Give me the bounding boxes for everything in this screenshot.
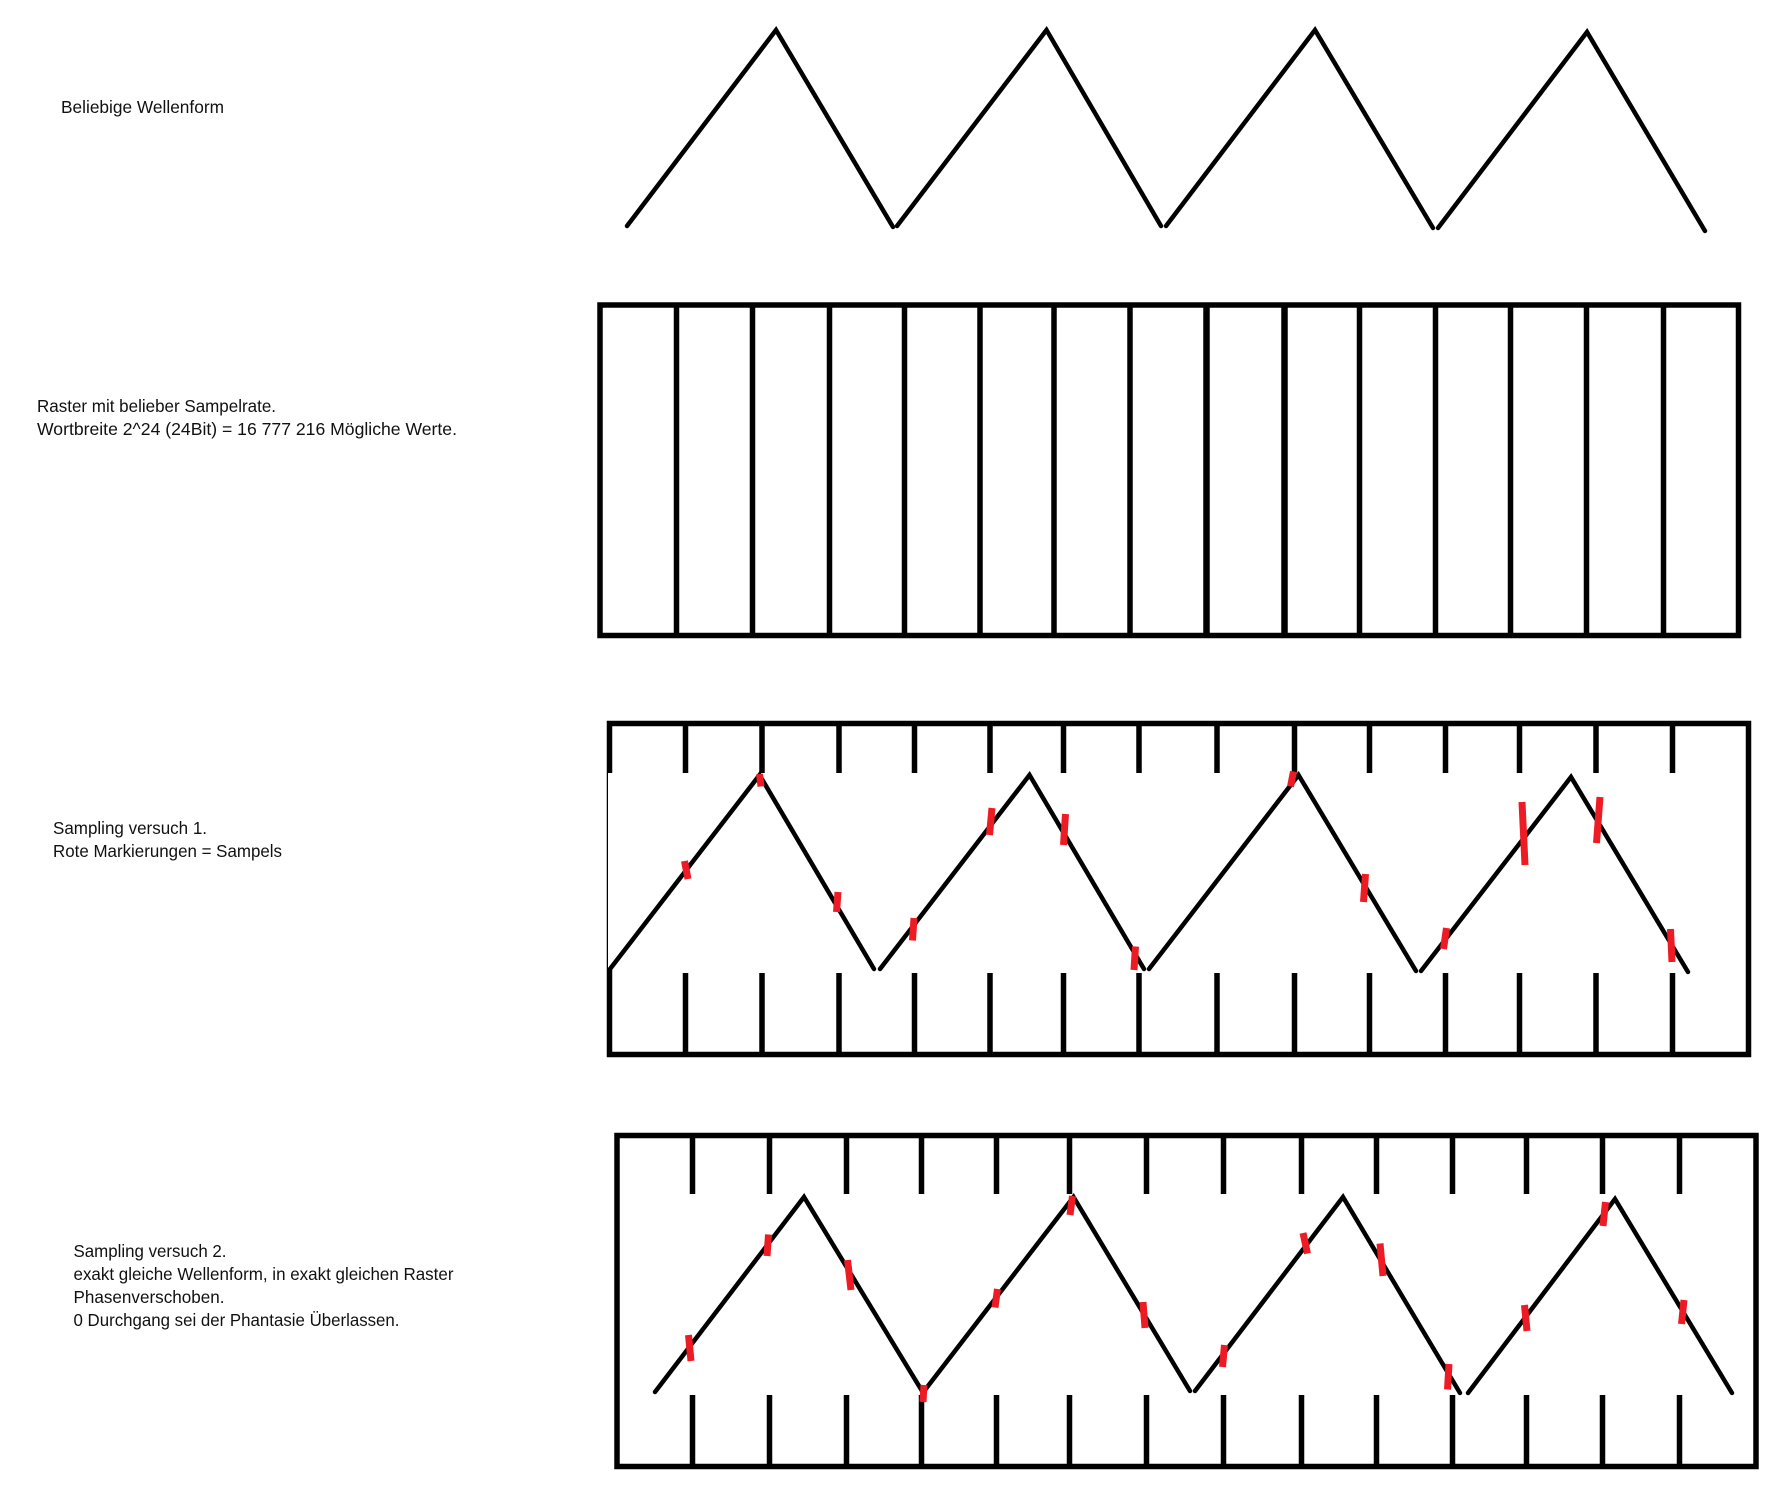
text: sampling attempt 2 description: 0 Durchgang sei der Phantasie Überlassen.	[74, 1310, 400, 1330]
text: sampling attempt 1 description	[53, 818, 282, 861]
text: raster description: Wortbreite 2^24 (24Bit) = 16 777 216 Mögliche Werte.	[37, 419, 457, 439]
text: sampling attempt 2 description: Phasenverschoben.	[74, 1287, 224, 1307]
text: sampling attempt 1 description: Rote Markierungen = Sampels	[53, 841, 282, 861]
chart: sampling raster	[600, 305, 1738, 636]
text: Beliebige Wellenform: Beliebige Wellenform	[61, 97, 224, 117]
text: raster description: Raster mit belieber Sampelrate.	[37, 396, 276, 416]
raster frame with ticks	[617, 1136, 1756, 1466]
text: sampling attempt 2 description: Sampling versuch 2.	[74, 1241, 226, 1261]
panel: sampling attempt 1	[607, 724, 1748, 1054]
text: sampling attempt 1 description: Sampling versuch 1.	[53, 818, 207, 838]
panel: sampling attempt 2	[617, 1136, 1756, 1466]
text: sampling attempt 2 description: exakt gleiche Wellenform, in exakt gleichen Raster	[74, 1264, 454, 1284]
red sample markers	[688, 1196, 1684, 1402]
text: raster description	[37, 396, 457, 439]
waveform	[655, 1197, 1732, 1393]
chart: arbitrary waveform	[627, 30, 1705, 231]
waveform	[610, 775, 1688, 972]
red sample markers	[684, 772, 1672, 970]
raster frame with ticks	[607, 724, 1748, 1054]
text: sampling attempt 2 description	[74, 1241, 454, 1330]
